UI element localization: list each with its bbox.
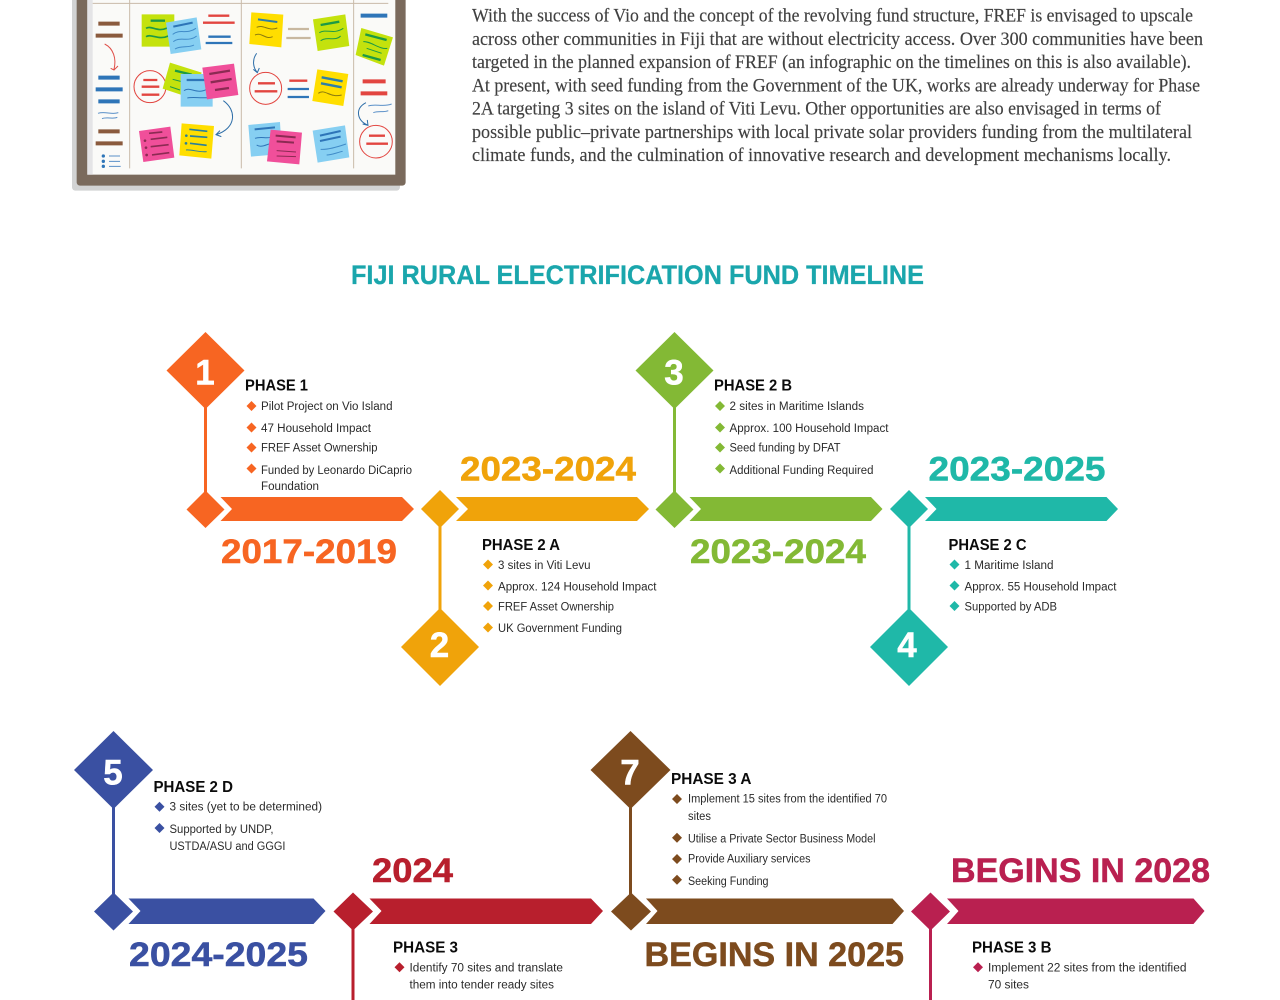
phase 3 A milestone: sites bbox=[688, 811, 711, 823]
intro paragraph: climate funds, and the culmination of innovative research and development mechanisms locally. bbox=[472, 146, 1171, 166]
phase 3 A milestone: Seeking Funding bbox=[688, 876, 768, 888]
phase 3 A milestone bbox=[590, 731, 904, 974]
phase 3 B milestone bbox=[911, 852, 1210, 1000]
phase 2 B milestone: 2023-2024 bbox=[690, 533, 866, 571]
phase 3 A milestone: 7 bbox=[620, 754, 640, 792]
phase 2 A milestone: 2 bbox=[430, 626, 449, 665]
phase 2 D milestone: 2024-2025 bbox=[129, 936, 308, 974]
phase 2 A milestone: UK Government Funding bbox=[498, 623, 622, 635]
phase 1 milestone: 2017-2019 bbox=[221, 533, 397, 571]
phase 2 B milestone: Additional Funding Required bbox=[730, 465, 874, 477]
phase 2 C milestone: 4 bbox=[897, 626, 917, 665]
intro paragraph bbox=[472, 6, 1203, 166]
phase 2 A milestone bbox=[401, 450, 657, 686]
phase 2 D milestone: 5 bbox=[103, 754, 123, 792]
phase 3 B milestone: PHASE 3 B bbox=[972, 940, 1052, 956]
phase 1 milestone: Pilot Project on Vio Island bbox=[261, 401, 392, 413]
phase 3 milestone: PHASE 3 bbox=[393, 940, 458, 956]
intro paragraph: At present, with seed funding from the Government of the UK, works are already underway for Phase bbox=[472, 76, 1200, 96]
phase 2 C milestone: Supported by ADB bbox=[964, 602, 1057, 614]
phase 3 A milestone: Implement 15 sites from the identified 70 bbox=[688, 794, 887, 806]
phase 2 C milestone bbox=[870, 450, 1118, 686]
phase 1 milestone: PHASE 1 bbox=[245, 378, 308, 394]
phase 3 A milestone: Provide Auxiliary services bbox=[688, 854, 811, 866]
phase 2 A milestone: PHASE 2 A bbox=[482, 537, 560, 554]
phase 2 C milestone: 1 Maritime Island bbox=[964, 560, 1054, 572]
phase 3 B milestone: BEGINS IN 2028 bbox=[951, 852, 1210, 890]
phase 2 C milestone: 2023-2025 bbox=[928, 450, 1106, 488]
phase 3 A milestone: Utilise a Private Sector Business Model bbox=[688, 834, 876, 846]
phase 3 milestone: them into tender ready sites bbox=[410, 980, 554, 992]
phase 2 C milestone: Approx. 55 Household Impact bbox=[964, 582, 1117, 594]
intro paragraph: targeted in the planned expansion of FREF (an infographic on the timelines on this is also available). bbox=[472, 53, 1191, 73]
phase 2 B milestone: 2 sites in Maritime Islands bbox=[730, 401, 864, 413]
intro paragraph: across other communities in Fiji that are without electricity access. Over 300 communities have been bbox=[472, 30, 1203, 50]
phase 1 milestone: 47 Household Impact bbox=[261, 423, 372, 435]
phase 2 D milestone: Supported by UNDP, bbox=[170, 824, 274, 836]
phase 2 A milestone: Approx. 124 Household Impact bbox=[498, 582, 657, 594]
phase 1 milestone: FREF Asset Ownership bbox=[261, 442, 378, 454]
phase 2 B milestone: 3 bbox=[664, 354, 684, 392]
phase 3 milestone: Identify 70 sites and translate bbox=[410, 962, 563, 974]
phase 2 B milestone: Approx. 100 Household Impact bbox=[730, 423, 889, 435]
phase 3 milestone: 2024 bbox=[372, 852, 453, 890]
phase 2 A milestone: FREF Asset Ownership bbox=[498, 602, 614, 614]
illustration: whiteboard with sticky notes bbox=[72, 0, 406, 191]
phase 2 A milestone: 3 sites in Viti Levu bbox=[498, 560, 590, 572]
phase 2 B milestone: Seed funding by DFAT bbox=[730, 442, 840, 454]
phase 3 A milestone: BEGINS IN 2025 bbox=[644, 936, 904, 974]
phase 1 milestone: Foundation bbox=[261, 481, 319, 493]
phase 1 milestone: 1 bbox=[195, 354, 215, 392]
intro paragraph: possible public–private partnerships with local private solar providers funding from the multilateral bbox=[472, 123, 1192, 143]
phase 2 B milestone: PHASE 2 B bbox=[714, 378, 792, 394]
phase 3 milestone bbox=[334, 852, 603, 1000]
phase 2 B milestone bbox=[636, 332, 889, 571]
phase 3 A milestone: PHASE 3 A bbox=[671, 771, 752, 788]
intro paragraph: With the success of Vio and the concept of the revolving fund structure, FREF is envisaged to upscale bbox=[472, 6, 1193, 26]
phase 1 milestone bbox=[166, 332, 414, 571]
phase 1 milestone: Funded by Leonardo DiCaprio bbox=[261, 465, 412, 477]
intro paragraph: 2A targeting 3 sites on the island of Viti Levu. Other opportunities are also envisaged in terms of bbox=[472, 100, 1162, 120]
phase 3 B milestone: Implement 22 sites from the identified bbox=[988, 962, 1186, 974]
phase 3 B milestone: 70 sites bbox=[988, 980, 1029, 992]
title: FIJI RURAL ELECTRIFICATION FUND TIMELINE bbox=[351, 260, 924, 290]
phase 2 D milestone: 3 sites (yet to be determined) bbox=[170, 802, 322, 814]
phase 2 A milestone: 2023-2024 bbox=[460, 450, 636, 488]
phase 2 D milestone bbox=[74, 731, 326, 974]
phase 2 C milestone: PHASE 2 C bbox=[948, 537, 1026, 554]
phase 2 D milestone: USTDA/ASU and GGGI bbox=[170, 841, 286, 853]
phase 2 D milestone: PHASE 2 D bbox=[154, 779, 233, 796]
